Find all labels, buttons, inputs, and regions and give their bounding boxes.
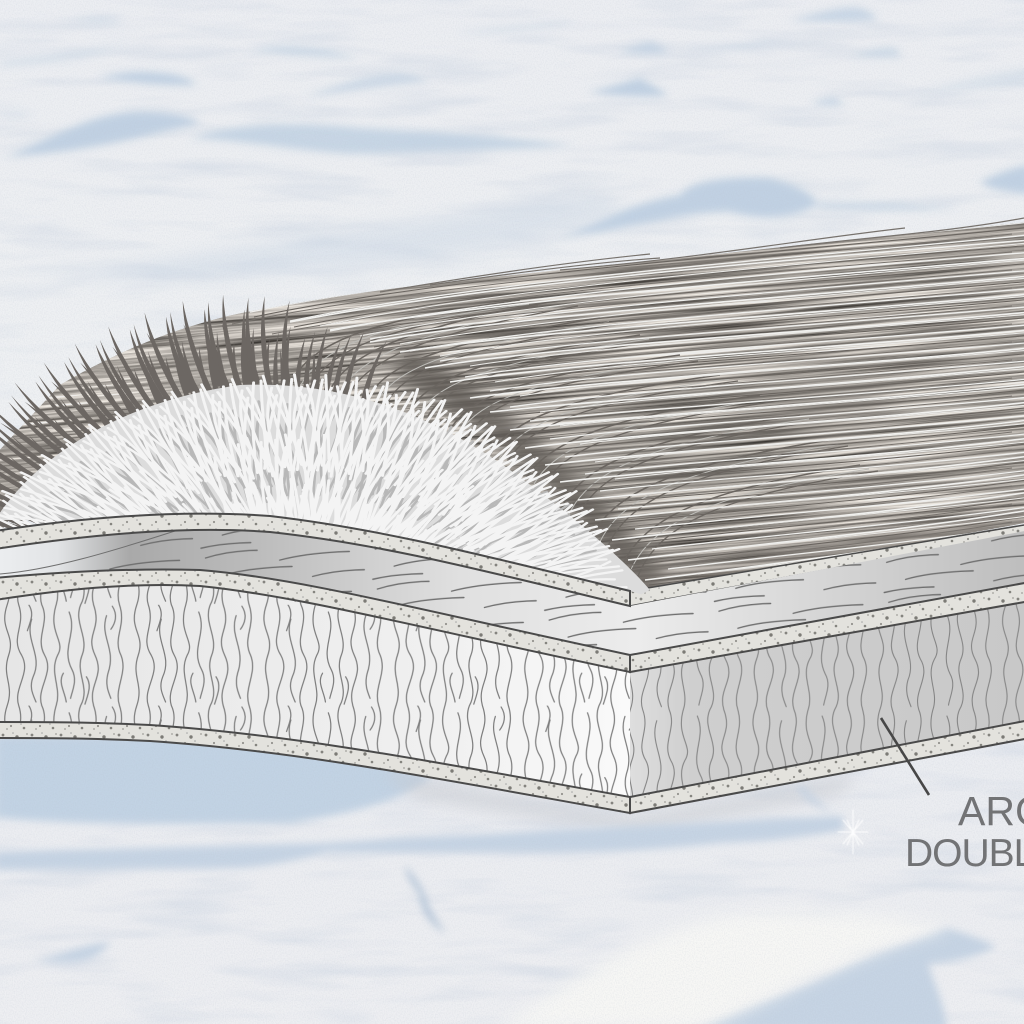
leader line: [881, 718, 929, 795]
lower snow shadows: [0, 785, 996, 1024]
snow drift shadows, upper field: [0, 8, 1024, 238]
top skin layer, right edge: [630, 524, 1024, 606]
label text: [905, 788, 1024, 875]
underfur dome: [0, 373, 650, 593]
lower skin layer: [0, 720, 1024, 813]
wool layer, left face: [0, 585, 630, 797]
top skin layer, front edge: [0, 514, 630, 606]
guard hair spikes along the arch: [0, 291, 388, 650]
wispy hair tips along top edge: [380, 218, 1024, 292]
guard hair body: [0, 222, 1024, 588]
shadow under the coat: [0, 735, 432, 824]
wool layer, right face: [630, 601, 1024, 797]
guard hair band behind spikes: [0, 371, 381, 520]
middle surface between skins: [0, 528, 1024, 655]
coat contact shadow: [380, 770, 860, 835]
underfur white strands: [0, 373, 628, 588]
sparkle: [838, 810, 868, 854]
underfur grey back row: [20, 400, 604, 572]
middle skin layer: [0, 569, 1024, 672]
snow mound: [500, 911, 950, 1024]
guard hair: [0, 217, 1024, 588]
